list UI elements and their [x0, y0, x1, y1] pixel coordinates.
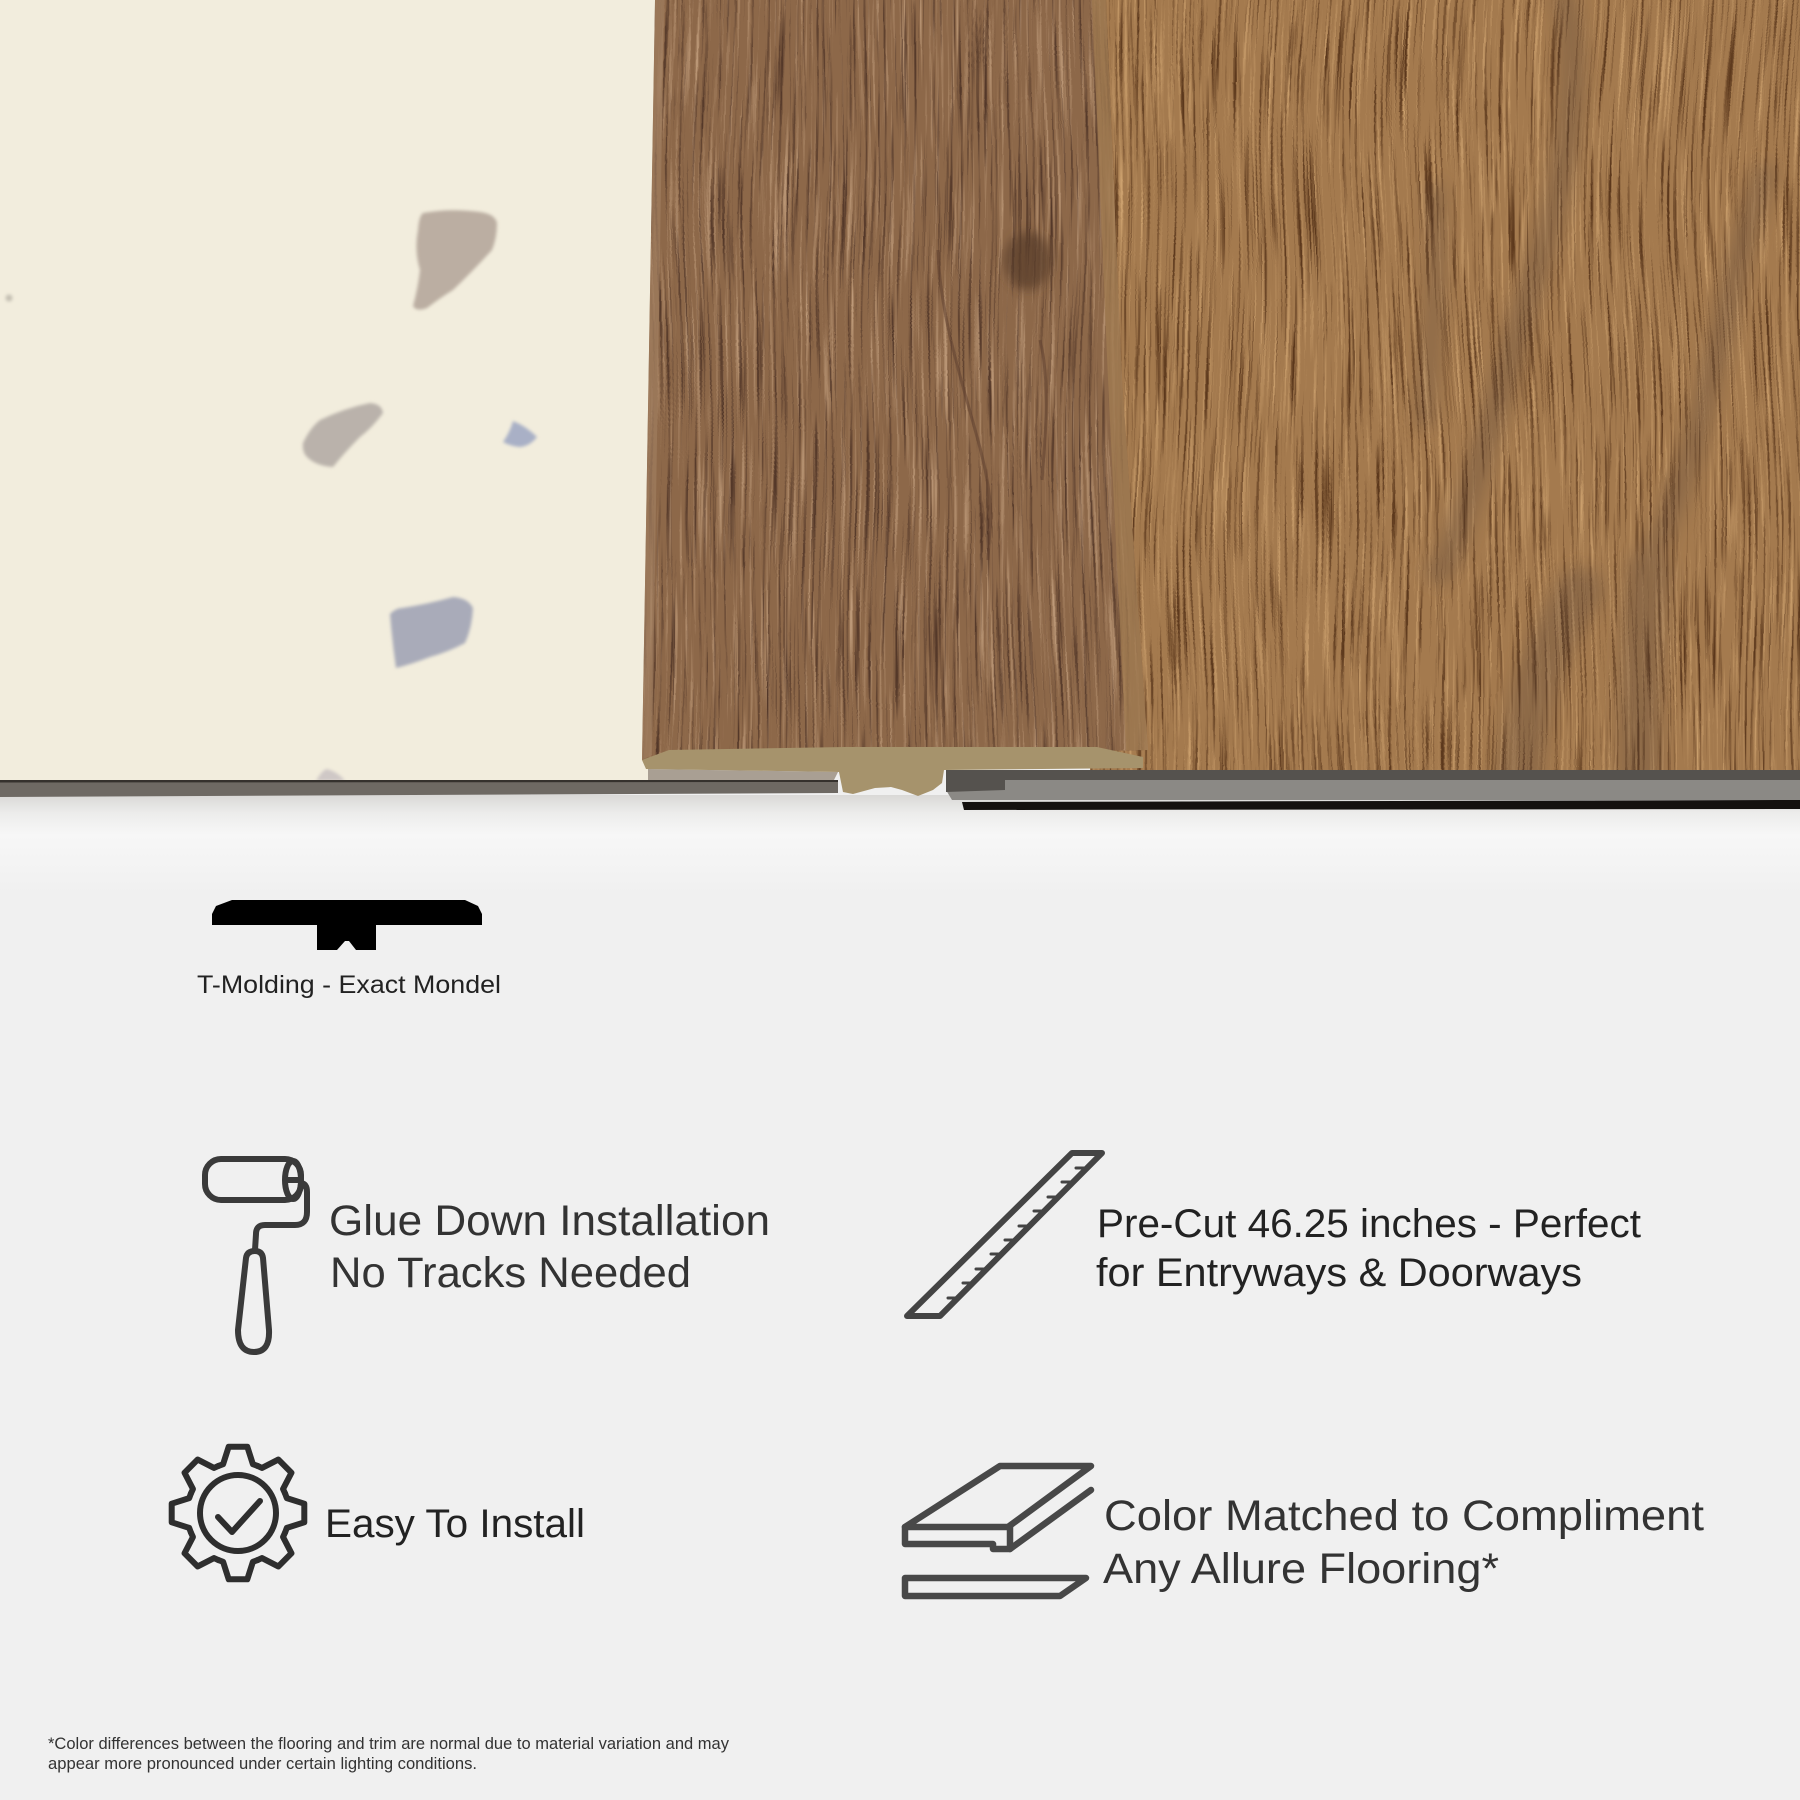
photo: left floor layer [0, 769, 838, 797]
text: easy to install: Easy To Install [325, 1502, 585, 1546]
text: pre-cut length: for Entryways & Doorways [1096, 1251, 1582, 1295]
photo: right floor layers [946, 770, 1800, 810]
icon: paint roller [205, 1159, 307, 1352]
knot in the wood [1004, 232, 1052, 290]
photo: flooring plank on the right [1090, 0, 1800, 770]
text: colour matched [1103, 1492, 1704, 1593]
photo: T-molding cut profile [642, 747, 1143, 796]
icon: plank and trim cross-section [905, 1466, 1091, 1596]
footnote: *Color differences between the flooring and trim are normal due to material variation and may [48, 1735, 730, 1753]
text: colour matched: Any Allure Flooring* [1103, 1545, 1499, 1593]
footnote: appear more pronounced under certain lighting conditions. [48, 1755, 477, 1773]
text: pre-cut length [1096, 1202, 1641, 1295]
icon: ruler strip [907, 1153, 1102, 1316]
lighter right bevel of molding [1092, 0, 1148, 750]
text: colour matched: Color Matched to Compliment [1104, 1492, 1704, 1540]
text: glue down installation: No Tracks Needed [330, 1249, 691, 1297]
footnote [48, 1735, 730, 1773]
wood grain curve around knot [938, 250, 1046, 560]
photo: T-molding wood face [642, 0, 1148, 760]
icon: gear with checkmark [172, 1447, 304, 1579]
text: glue down installation: Glue Down Installation [329, 1197, 770, 1245]
dark grain clusters [1425, 0, 1764, 770]
text: glue down installation [329, 1197, 770, 1297]
lighter left bevel of molding [642, 0, 664, 760]
icon: T-molding profile [212, 900, 482, 950]
caption: T-molding label: T-Molding - Exact Mondel [197, 971, 501, 999]
photo: shadow under flooring [0, 795, 1800, 895]
panel: cream terrazzo tile [0, 0, 660, 782]
terrazzo stones [6, 210, 537, 781]
text: pre-cut length: Pre-Cut 46.25 inches - Perfect [1097, 1202, 1641, 1246]
